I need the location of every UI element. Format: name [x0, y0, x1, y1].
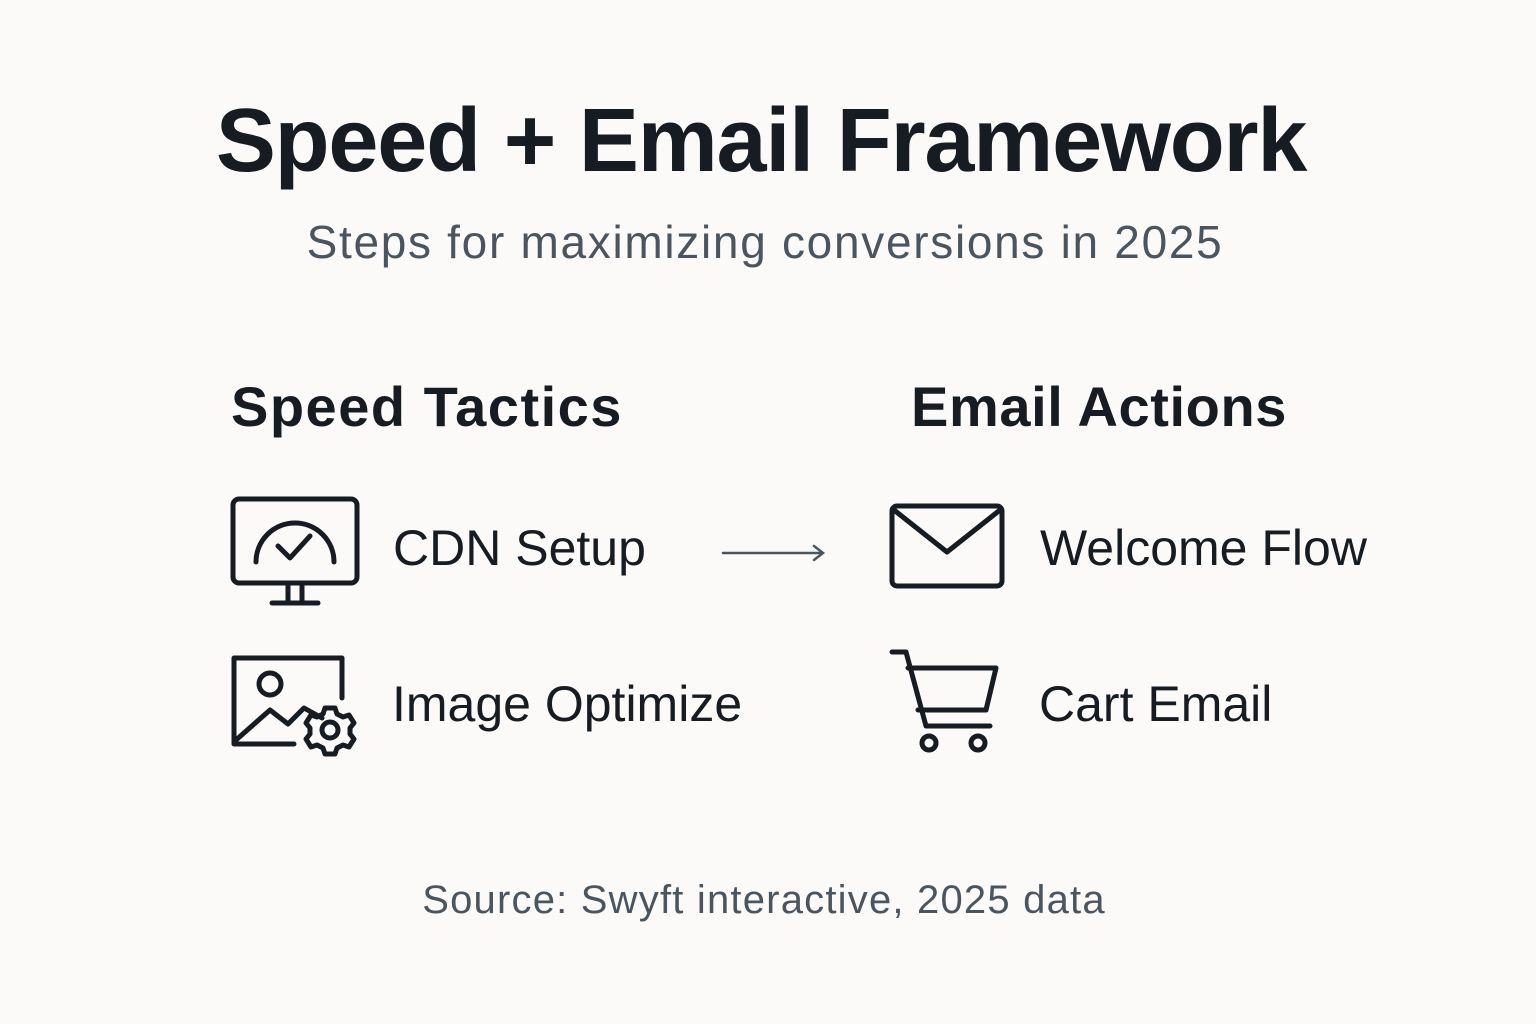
source note: Source: Swyft interactive, 2025 data [422, 878, 1106, 922]
title: Speed + Email Framework [216, 91, 1306, 191]
icon: shopping cart [890, 650, 998, 752]
icon: monitor with gauge [230, 496, 360, 606]
icon: image with gear [232, 656, 356, 756]
label: Welcome Flow: Welcome Flow [1040, 520, 1367, 576]
label: Image Optimize: Image Optimize [392, 676, 742, 732]
heading: Speed Tactics: Speed Tactics [231, 375, 623, 438]
icon: envelope [890, 504, 1004, 588]
label: CDN Setup: CDN Setup [393, 520, 646, 576]
subtitle: Steps for maximizing conversions in 2025 [307, 216, 1223, 268]
heading: Email Actions: Email Actions [911, 375, 1287, 438]
label: Cart Email: Cart Email [1039, 676, 1272, 732]
arrow [722, 544, 825, 562]
